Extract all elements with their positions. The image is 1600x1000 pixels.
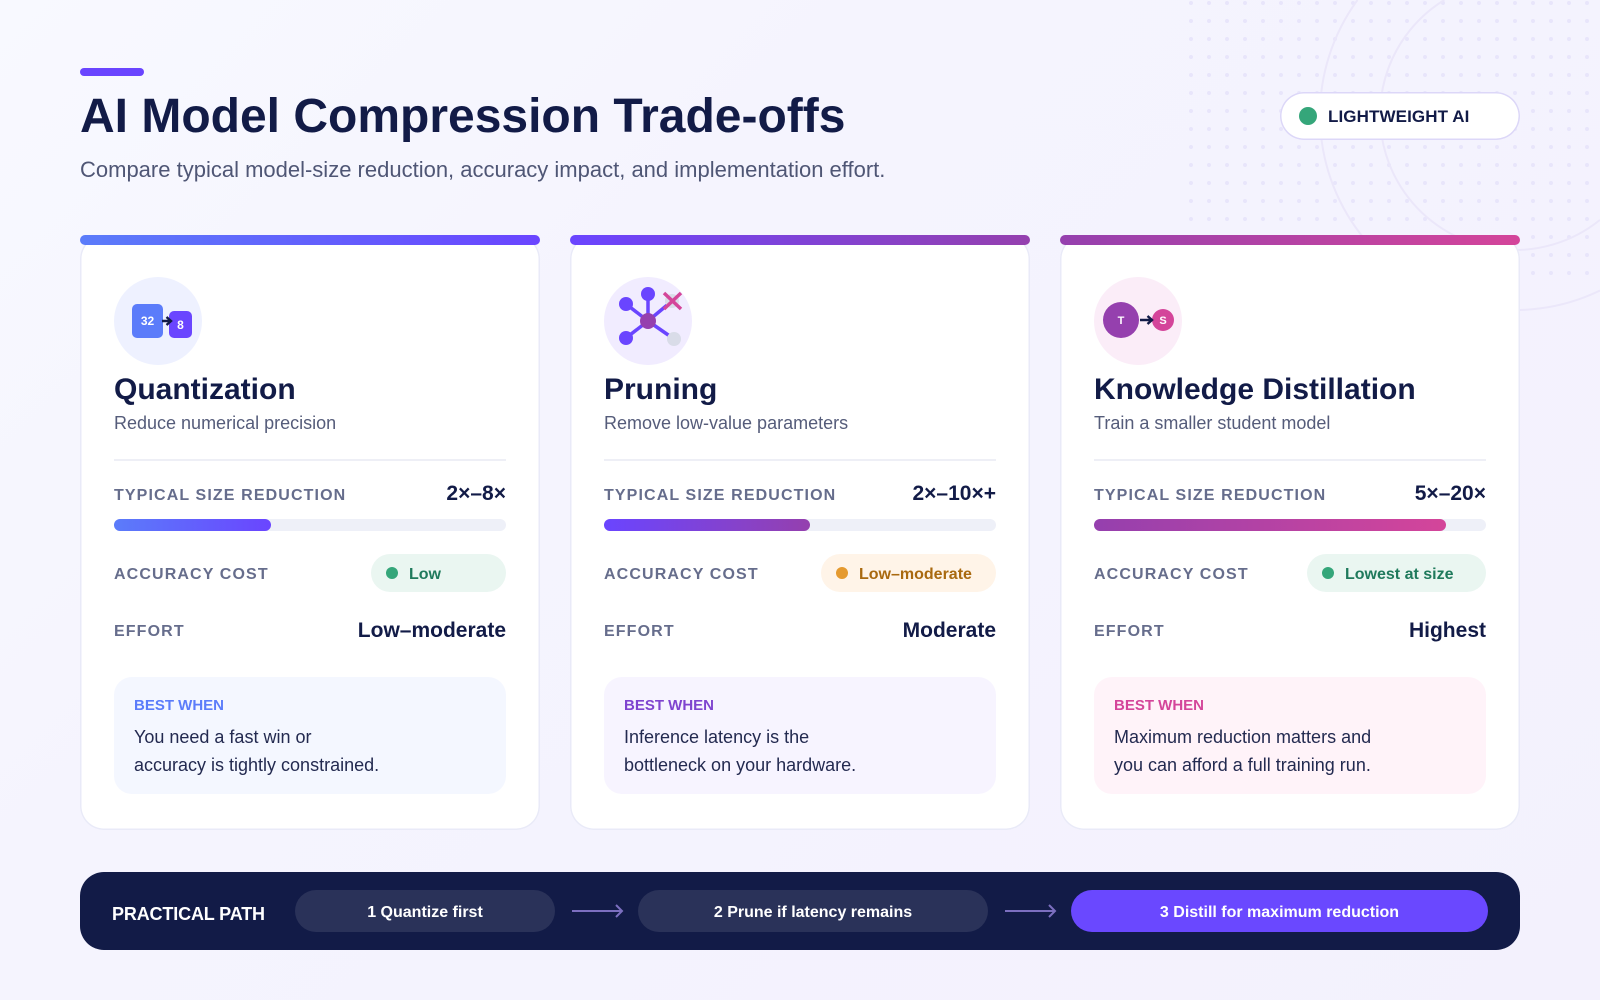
metric: accuracy cost (114, 554, 506, 592)
metric: size reduction: TYPICAL SIZE REDUCTION (114, 487, 346, 504)
callout: best when: BEST WHEN (134, 697, 224, 714)
step 1 (295, 890, 555, 932)
metric: accuracy cost (604, 554, 996, 592)
card title: Knowledge Distillation (1094, 373, 1416, 406)
metric: accuracy cost: Low–moderate (859, 566, 972, 583)
metric: size reduction: TYPICAL SIZE REDUCTION (604, 487, 836, 504)
metric: effort: EFFORT (1094, 623, 1165, 640)
icon: teacher to student (1094, 277, 1182, 365)
metric: effort (604, 619, 996, 642)
callout: best when: Inference latency is the (624, 727, 809, 747)
icon: 32-bit to 8-bit: 32 (141, 314, 154, 328)
callout: best when (604, 677, 996, 794)
step 2: 2 Prune if latency remains (714, 904, 912, 921)
callout: best when: Maximum reduction matters and (1114, 727, 1371, 747)
metric: effort: EFFORT (604, 623, 675, 640)
metric: effort (1094, 619, 1486, 642)
card subtitle: Remove low-value parameters (604, 413, 848, 433)
card subtitle: Reduce numerical precision (114, 413, 336, 433)
callout: best when (1094, 677, 1486, 794)
metric: accuracy cost (1094, 554, 1486, 592)
metric: accuracy cost: Lowest at size (1345, 566, 1453, 583)
icon: teacher to student: T (1118, 315, 1125, 327)
path label: PRACTICAL PATH (112, 904, 265, 924)
callout: best when: bottleneck on your hardware. (624, 755, 856, 775)
callout: best when (114, 677, 506, 794)
icon: pruned network (604, 277, 692, 365)
card title: Pruning (604, 373, 717, 406)
step 3 (1071, 890, 1488, 932)
metric: effort: Moderate (903, 619, 996, 642)
metric: accuracy cost: ACCURACY COST (604, 566, 759, 583)
metric: size reduction: TYPICAL SIZE REDUCTION (1094, 487, 1326, 504)
card subtitle: Train a smaller student model (1094, 413, 1330, 433)
metric: size reduction: 2×–8× (446, 482, 506, 505)
panel: pruning (570, 235, 1030, 830)
metric: size reduction (604, 482, 996, 531)
metric: size reduction: 2×–10×+ (912, 482, 996, 505)
badge: lightweight AI (1280, 92, 1520, 140)
subtitle: Compare typical model-size reduction, accuracy impact, and implementation effort. (80, 157, 885, 182)
icon: teacher to student: S (1159, 315, 1167, 327)
callout: best when: BEST WHEN (1114, 697, 1204, 714)
metric: accuracy cost: Low (409, 566, 441, 583)
card title: Quantization (114, 373, 296, 406)
metric: size reduction (114, 482, 506, 531)
metric: accuracy cost: ACCURACY COST (1094, 566, 1249, 583)
metric: size reduction (1094, 482, 1486, 531)
metric: effort: EFFORT (114, 623, 185, 640)
practical path bar (80, 872, 1520, 950)
title: AI Model Compression Trade-offs (80, 90, 845, 143)
callout: best when: accuracy is tightly constrained. (134, 755, 379, 775)
icon: 32-bit to 8-bit: 8 (177, 318, 184, 332)
step 1: 1 Quantize first (367, 904, 483, 921)
arrow (1005, 904, 1056, 918)
accent bar (80, 68, 144, 76)
callout: best when: you can afford a full training run. (1114, 755, 1371, 775)
step 2 (638, 890, 988, 932)
badge: lightweight AI: LIGHTWEIGHT AI (1328, 107, 1469, 126)
metric: effort: Highest (1409, 619, 1486, 642)
panel: knowledge distillation (1060, 235, 1520, 830)
metric: accuracy cost: ACCURACY COST (114, 566, 269, 583)
arrow (572, 904, 624, 918)
metric: effort: Low–moderate (358, 619, 506, 642)
metric: size reduction: 5×–20× (1415, 482, 1486, 505)
icon: 32-bit to 8-bit (114, 277, 202, 365)
callout: best when: You need a fast win or (134, 727, 311, 747)
callout: best when: BEST WHEN (624, 697, 714, 714)
metric: effort (114, 619, 506, 642)
step 3: 3 Distill for maximum reduction (1160, 904, 1399, 921)
panel: quantization (80, 235, 540, 830)
